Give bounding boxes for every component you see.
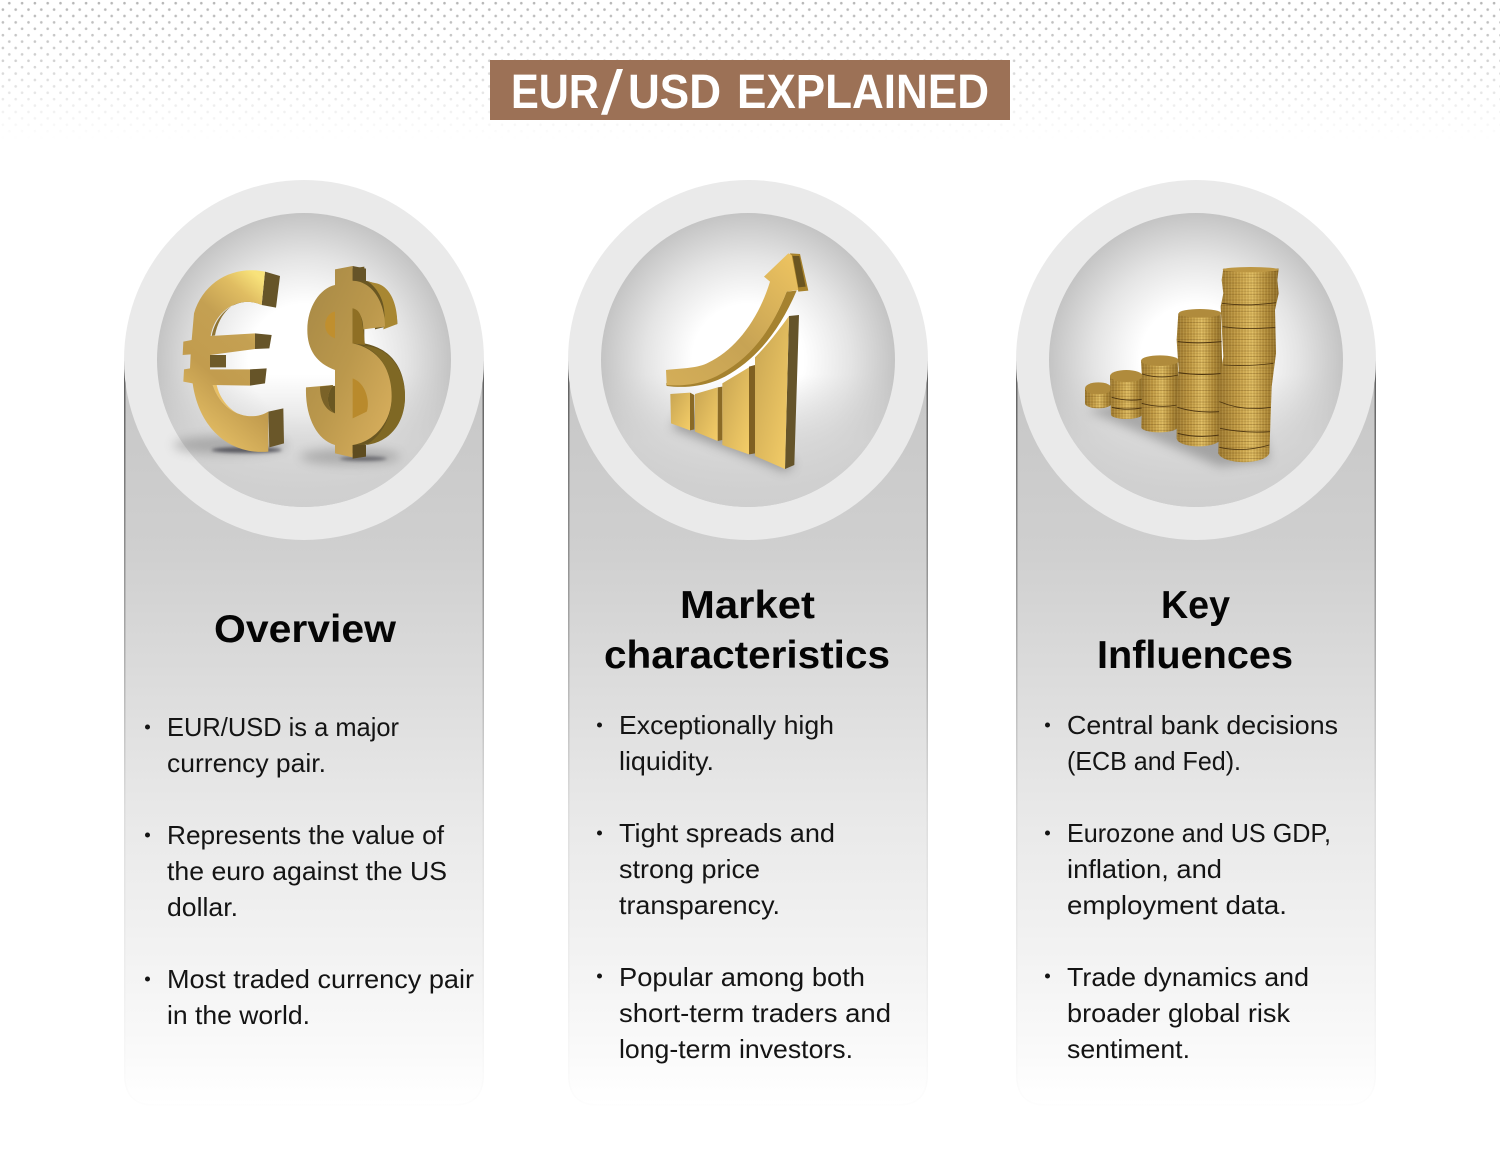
list: market bullets: liquidity. bbox=[619, 746, 714, 776]
icon: gold euro and dollar symbols bbox=[173, 266, 405, 465]
panel: key influences bbox=[1016, 180, 1376, 1105]
list: overview bullets: dollar. bbox=[167, 892, 238, 922]
list: influences bullets: (ECB and Fed). bbox=[1067, 746, 1241, 776]
list: overview bullets: Represents the value of bbox=[167, 820, 445, 850]
list: market bullets bbox=[597, 710, 891, 1064]
title banner: / bbox=[601, 59, 624, 128]
list: overview bullets: in the world. bbox=[167, 1000, 310, 1030]
icon: gold bar chart with arrow bbox=[666, 253, 808, 472]
list: market bullets: Tight spreads and bbox=[619, 818, 835, 848]
list: overview bullets: Most traded currency pair bbox=[167, 964, 474, 994]
heading: overview: Overview bbox=[214, 608, 397, 651]
heading: key influences: Key bbox=[1161, 584, 1230, 627]
dotted background header bbox=[2, 2, 1500, 120]
list: overview bullets: currency pair. bbox=[167, 748, 326, 778]
panel: market characteristics bbox=[568, 180, 928, 1105]
list: overview bullets: EUR/USD is a major bbox=[167, 712, 399, 742]
icon circle: euro and dollar bbox=[124, 180, 484, 540]
list: market bullets: long-term investors. bbox=[619, 1034, 853, 1064]
list: market bullets: transparency. bbox=[619, 890, 780, 920]
list: influences bullets: broader global risk bbox=[1067, 998, 1291, 1028]
title banner: EUR bbox=[511, 66, 599, 119]
list: influences bullets: employment data. bbox=[1067, 890, 1287, 920]
list: influences bullets bbox=[1045, 710, 1338, 1064]
list: influences bullets: Eurozone and US GDP, bbox=[1067, 818, 1331, 848]
icon circle: rising chart bbox=[568, 180, 928, 540]
list: market bullets: Exceptionally high bbox=[619, 710, 834, 740]
title banner: USD bbox=[628, 66, 721, 119]
list: influences bullets: inflation, and bbox=[1067, 854, 1222, 884]
list: influences bullets: sentiment. bbox=[1067, 1034, 1190, 1064]
list: influences bullets: Central bank decisions bbox=[1067, 710, 1338, 740]
panel: overview bbox=[124, 180, 484, 1105]
title banner: EXPLAINED bbox=[737, 66, 989, 119]
heading: key influences bbox=[1097, 584, 1293, 677]
heading: market characteristics: characteristics bbox=[604, 634, 890, 677]
panel background bbox=[569, 360, 927, 1105]
icon: gold coin stacks bbox=[1085, 267, 1279, 467]
list: market bullets: short-term traders and bbox=[619, 998, 891, 1028]
icon circle: coin stacks bbox=[1016, 180, 1376, 540]
heading: market characteristics: Market bbox=[680, 584, 815, 627]
list: market bullets: Popular among both bbox=[619, 962, 865, 992]
heading: key influences: Influences bbox=[1097, 634, 1293, 677]
list: influences bullets: Trade dynamics and bbox=[1067, 962, 1309, 992]
panel background bbox=[125, 360, 483, 1105]
list: overview bullets: the euro against the US bbox=[167, 856, 447, 886]
list: market bullets: strong price bbox=[619, 854, 760, 884]
panel background bbox=[1017, 360, 1375, 1105]
title banner bbox=[490, 59, 1010, 128]
list: overview bullets bbox=[145, 712, 474, 1030]
heading: market characteristics bbox=[604, 584, 890, 677]
